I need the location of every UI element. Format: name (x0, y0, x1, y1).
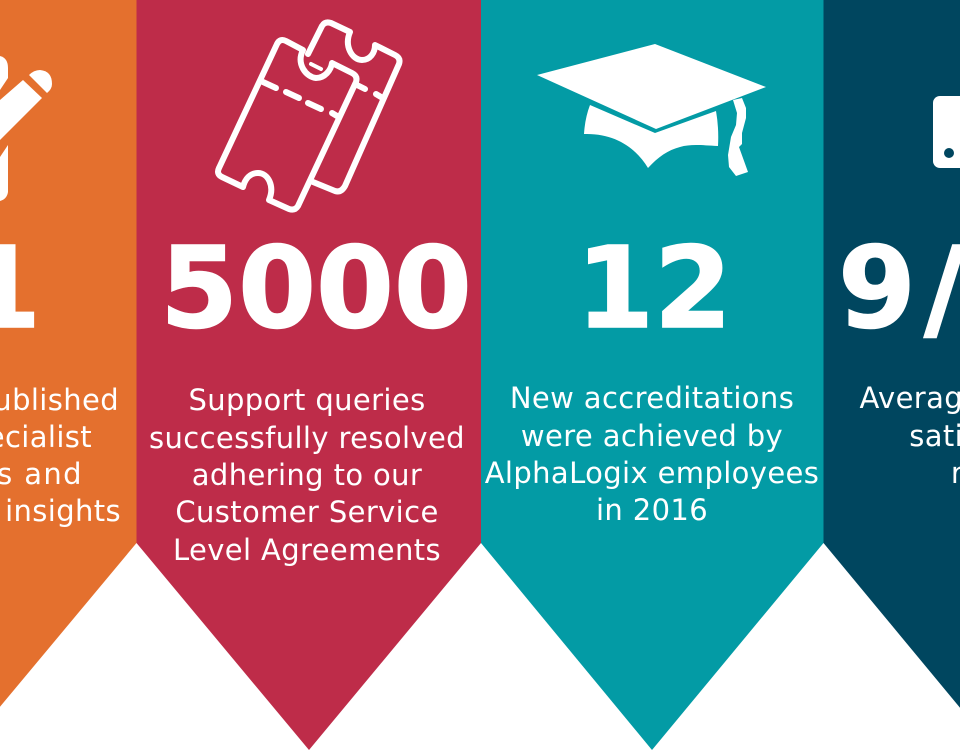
panel: navy banner (824, 0, 960, 750)
icon: graduation cap (537, 44, 766, 176)
panel: orange banner (0, 0, 136, 750)
text: crimson description: Customer Service (175, 495, 439, 529)
stat number: 5000: 5000 (160, 224, 472, 354)
panel: crimson banner (136, 0, 481, 750)
text: teal description (485, 381, 819, 527)
text: crimson description: adhering to our (192, 458, 422, 492)
icon: tickets (218, 22, 400, 210)
text: teal description: AlphaLogix employees (485, 456, 819, 490)
text: teal description: were achieved by (521, 419, 783, 453)
text: navy description (860, 381, 960, 490)
text: orange description (0, 383, 121, 528)
icon: device (933, 96, 960, 168)
text: teal description: in 2016 (596, 493, 708, 527)
text: crimson description: successfully resolved (149, 421, 465, 455)
stat number: 12: 12 (576, 224, 732, 354)
icon: clipboard and pencil (0, 56, 52, 201)
text: crimson description: Level Agreements (173, 533, 441, 567)
text: crimson description: Support queries (188, 383, 426, 417)
text: crimson description (149, 383, 465, 567)
panel: teal banner (481, 0, 824, 750)
text: teal description: New accreditations (510, 381, 794, 415)
